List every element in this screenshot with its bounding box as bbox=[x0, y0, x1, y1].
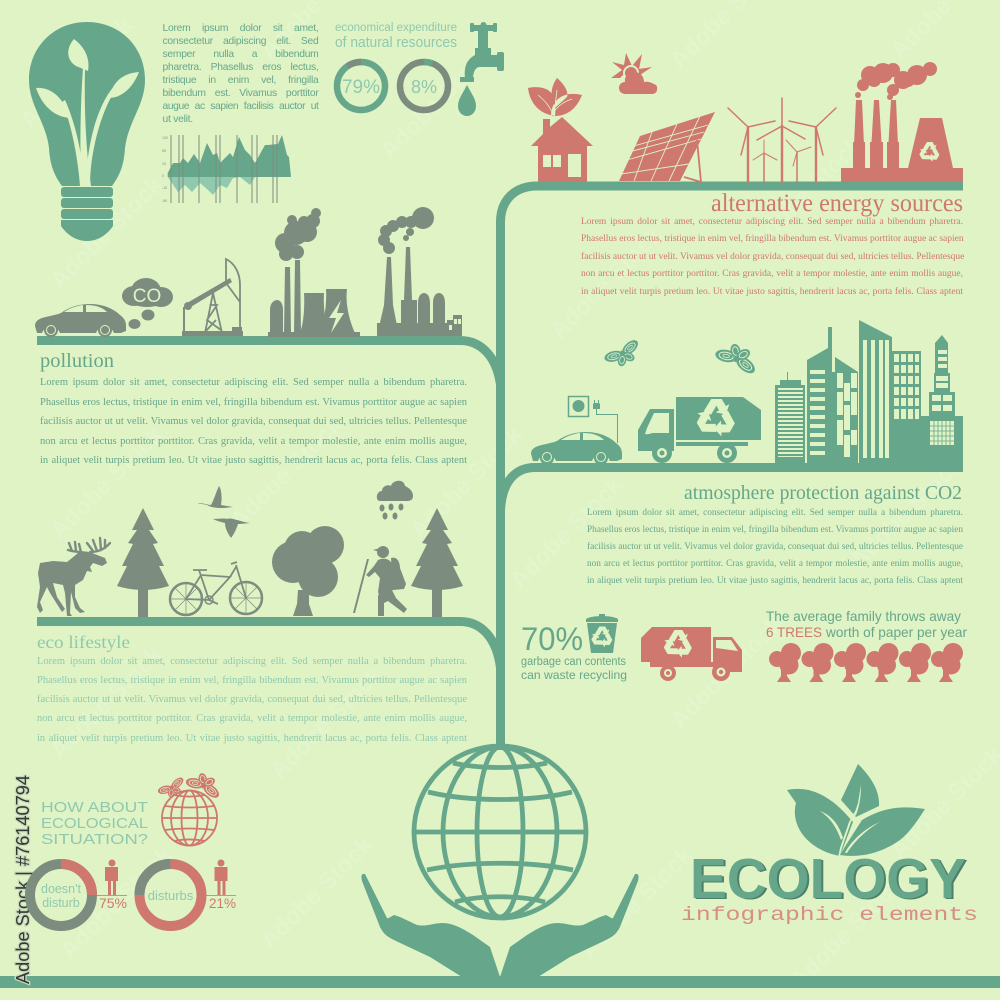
icon: recycling truck bbox=[638, 397, 761, 463]
heading: atmosphere protection: atmosphere protection against CO2 bbox=[684, 483, 962, 504]
text: Adobe Stock bbox=[265, 661, 388, 784]
text block: alternative energy: in aliquet velit turpis pretium leo. Ut vitae justo sagittis, hendrerit lacus ac, porta felis. Class aptent bbox=[581, 286, 963, 296]
text: Adobe Stock bbox=[785, 871, 908, 994]
text block: alternative energy bbox=[581, 216, 964, 296]
area chart: 100 bbox=[162, 136, 168, 140]
atmosphere protection scene bbox=[531, 320, 963, 465]
text: Adobe Stock bbox=[845, 451, 968, 574]
text block: atmosphere protection: non arcu et lectus porttitor porttitor. Cras gravida, velit a tempor molestie, ante enim mollis augue, bbox=[587, 558, 963, 568]
stat: 70% garbage recycling: garbage can contents bbox=[521, 656, 626, 668]
icon: power plant with smoke bbox=[268, 208, 360, 337]
text block: eco lifestyle: facilisis auctor ut ut velit. Vivamus vel dolor gravida, consequat dui sed, ultricies tellus. Pellentesque bbox=[37, 694, 467, 705]
stat: 75% person: 75% bbox=[99, 896, 127, 911]
donut: 8% bbox=[400, 62, 448, 110]
text: Adobe Stock bbox=[545, 221, 668, 344]
icon: water tap and drop bbox=[458, 22, 504, 116]
economical expenditure title: of natural resources bbox=[335, 35, 457, 51]
text block: atmosphere protection: facilisis auctor ut ut velit. Vivamus vel dolor gravida, consequat dui sed, ultricies tellus. Pellentesque bbox=[587, 542, 963, 552]
text block: atmosphere protection: in aliquet velit turpis pretium leo. Ut vitae justo sagittis, hendrerit lacus ac, porta felis. Class aptent bbox=[587, 576, 963, 586]
icon: recycling bin bbox=[586, 614, 618, 653]
economical expenditure title: economical expenditure bbox=[335, 22, 457, 34]
title: ECOLOGY: ECOLOGY bbox=[690, 847, 966, 911]
stat: 21% person: 21% bbox=[209, 896, 236, 911]
subtitle: infographic elements: infographic elements bbox=[681, 904, 978, 926]
text block: pollution: Lorem ipsum dolor sit amet, consectetur adipiscing elit. Sed semper nulla a bibendum pharetra. bbox=[40, 377, 467, 388]
text block: atmosphere protection: Phasellus eros lectus, tristique in enim vel, fringilla bibendum est. Vivamus porttitor augue ac sapien bbox=[587, 524, 963, 534]
text: average family throws away bbox=[766, 608, 967, 640]
text: Adobe Stock bbox=[665, 611, 788, 734]
text block: pollution: Phasellus eros lectus, tristique in enim vel, fringilla bibendum est. Vivamus porttitor augue ac sapien bbox=[40, 396, 467, 408]
icon: butterfly left bbox=[601, 336, 646, 374]
stat: 21% person bbox=[206, 860, 236, 911]
heading: pollution: pollution bbox=[40, 350, 114, 372]
text block: eco lifestyle bbox=[37, 656, 467, 744]
heading: eco lifestyle: eco lifestyle bbox=[37, 632, 130, 652]
text block: alternative energy: non arcu et lectus porttitor porttitor. Cras gravida, velit a tempor molestie, ante enim mollis augue, bbox=[581, 269, 963, 279]
text: how about ecological situation: ECOLOGICAL bbox=[41, 816, 148, 832]
text: average family throws away: The average family throws away bbox=[766, 608, 961, 624]
icon: flying birds bbox=[197, 486, 250, 538]
title: ECOLOGY: ECOLOGY bbox=[692, 848, 968, 912]
icon: car bbox=[35, 304, 126, 337]
donut: doesn't disturb: disturb bbox=[42, 896, 80, 910]
eco lifestyle scene bbox=[37, 481, 463, 617]
text block: eco lifestyle: in aliquet velit turpis pretium leo. Ut vitae justo sagittis, hendrerit lacus ac, porta felis. Class aptent bbox=[37, 733, 467, 744]
text block: alternative energy: facilisis auctor ut ut velit. Vivamus vel dolor gravida, consequat dui sed, ultricies tellus. Pellentesque bbox=[581, 252, 964, 262]
text block: pollution bbox=[40, 377, 467, 466]
text: average family throws away: worth of paper per year bbox=[825, 624, 967, 640]
text block: top lorem: consectetur adipiscing elit. Sed bbox=[162, 36, 318, 47]
text: Adobe Stock bbox=[225, 411, 348, 534]
icon: bicycle bbox=[170, 562, 262, 615]
icon: oil pumpjack bbox=[182, 259, 243, 336]
icon: broadleaf tree bbox=[272, 526, 344, 616]
area chart: 50 bbox=[162, 149, 166, 153]
icon: socket and plug bbox=[568, 396, 618, 443]
text: Adobe Stock bbox=[405, 421, 528, 544]
area chart: 10 bbox=[162, 162, 166, 166]
text block: top lorem: semper nulla a bibendum bbox=[162, 49, 318, 60]
text: Adobe Stock bbox=[745, 131, 868, 254]
text block: top lorem: tristique in enim vel, fringilla bbox=[162, 75, 318, 86]
area chart: -50 bbox=[162, 199, 167, 203]
text block: atmosphere protection bbox=[587, 508, 963, 586]
text: Adobe Stock bbox=[55, 841, 178, 964]
donut: disturbs: disturbs bbox=[148, 888, 194, 903]
text block: eco lifestyle: Phasellus eros lectus, tristique in enim vel, fringilla bibendum est. Vivamus porttitor augue ac sapien bbox=[37, 675, 467, 686]
donut: 8%: 8% bbox=[411, 77, 437, 97]
icon: large globe bbox=[414, 746, 586, 918]
pollution scene bbox=[35, 207, 462, 337]
icon: sun and cloud bbox=[611, 53, 657, 94]
alternative energy scene bbox=[528, 53, 963, 182]
text: average family throws away: 6 TREES bbox=[766, 624, 822, 640]
text: Adobe Stock bbox=[45, 641, 168, 764]
icon: ecology leaves logo bbox=[787, 764, 925, 867]
text: Adobe Stock bbox=[375, 41, 498, 164]
stat: 70% garbage recycling: 70% bbox=[521, 621, 583, 657]
text block: eco lifestyle: non arcu et lectus porttitor porttitor. Cras gravida, velit a tempor molestie, ante enim mollis augue, bbox=[37, 713, 467, 724]
icon: pine tree right bbox=[411, 508, 463, 617]
text block: pollution: in aliquet velit turpis pretium leo. Ut vitae justo sagittis, hendrerit lacus ac, porta felis. Class aptent bbox=[40, 455, 467, 466]
CO cloud bbox=[122, 278, 173, 329]
icon: factory with smoke bbox=[377, 207, 462, 336]
text block: top lorem: pharetra. Phasellus eros lectus, bbox=[162, 62, 318, 73]
text: Adobe Stock bbox=[505, 471, 628, 594]
icon: wind turbines bbox=[728, 98, 836, 182]
text block: eco lifestyle: Lorem ipsum dolor sit amet, consectetur adipiscing elit. Sed semper nulla a bibendum pharetra. bbox=[37, 656, 467, 666]
stat: 70% garbage recycling: can waste recycling bbox=[521, 668, 627, 682]
donut: doesn't disturb bbox=[30, 864, 92, 926]
icon: moose bbox=[37, 538, 110, 616]
donut: 79% bbox=[337, 62, 385, 110]
text: how about ecological situation bbox=[41, 800, 148, 848]
light bulb with plant bbox=[29, 22, 145, 241]
icon: small red globe bbox=[162, 790, 217, 846]
icon: red recycling truck bbox=[641, 627, 742, 681]
icon: city skyline bbox=[775, 320, 963, 464]
area chart bbox=[162, 135, 291, 203]
text: Adobe Stock bbox=[15, 11, 138, 134]
donut: disturbs bbox=[140, 864, 202, 926]
text: Adobe Stock bbox=[255, 831, 378, 954]
text: how about ecological situation: SITUATION? bbox=[41, 832, 148, 848]
text block: atmosphere protection: Lorem ipsum dolor sit amet, consectetur adipiscing elit. Sed semper nulla a bibendum pharetra. bbox=[587, 508, 963, 518]
icon: electric car bbox=[531, 432, 622, 465]
icon: factory with recycling tower bbox=[841, 62, 963, 182]
stat: 75% person bbox=[97, 860, 127, 911]
icon: pine tree left bbox=[117, 508, 169, 617]
bottom ground bar bbox=[0, 976, 1000, 988]
text block: top lorem: bibendum est. Vivamus porttitor bbox=[162, 88, 318, 99]
stat: 70% garbage recycling bbox=[521, 614, 627, 682]
text block: pollution: facilisis auctor ut ut velit. Vivamus vel dolor gravida, consequat dui sed, ultricies tellus. Pellentesque bbox=[40, 416, 467, 427]
area chart: 0 bbox=[162, 174, 164, 178]
economical expenditure title bbox=[335, 22, 457, 51]
icon: solar panel bbox=[619, 112, 715, 182]
icon: butterfly right bbox=[712, 335, 764, 378]
donut: 79%: 79% bbox=[342, 77, 380, 98]
donut: doesn't disturb: doesn't bbox=[41, 882, 81, 896]
text: Adobe Stock bbox=[45, 421, 168, 544]
icon: six trees bbox=[769, 643, 963, 682]
text block: alternative energy: Lorem ipsum dolor sit amet, consectetur adipiscing elit. Sed semper nulla a bibendum pharetra. bbox=[581, 216, 963, 226]
text: Adobe Stock id: Adobe Stock | #76140794 bbox=[12, 775, 33, 984]
text block: top lorem: ut velit. bbox=[162, 114, 193, 125]
text block: top lorem: Lorem ipsum dolor sit amet, bbox=[162, 23, 318, 34]
area chart: -10 bbox=[162, 186, 167, 190]
icon: hiker bbox=[353, 546, 407, 616]
icon: cupped hands bbox=[361, 874, 639, 977]
text: Adobe Stock bbox=[575, 841, 698, 964]
CO cloud: CO bbox=[133, 286, 161, 307]
icon: red butterflies bbox=[155, 766, 226, 803]
text block: pollution: non arcu et lectus porttitor porttitor. Cras gravida, velit a tempor molestie, ante enim mollis augue, bbox=[40, 436, 467, 446]
icon: rain cloud bbox=[377, 481, 413, 520]
text: how about ecological situation: HOW ABOUT bbox=[41, 800, 148, 816]
text: Adobe Stock bbox=[45, 171, 168, 294]
text block: top lorem bbox=[162, 23, 319, 125]
icon: house with leaves bbox=[528, 78, 593, 182]
tree trunk and branches bbox=[37, 186, 963, 750]
text block: top lorem: augue ac sapien facilisis auctor ut bbox=[162, 101, 318, 112]
heading: alternative energy sources: alternative energy sources bbox=[711, 190, 963, 217]
text block: alternative energy: Phasellus eros lectus, tristique in enim vel, fringilla bibendum est. Vivamus porttitor augue ac sapien bbox=[581, 234, 964, 244]
